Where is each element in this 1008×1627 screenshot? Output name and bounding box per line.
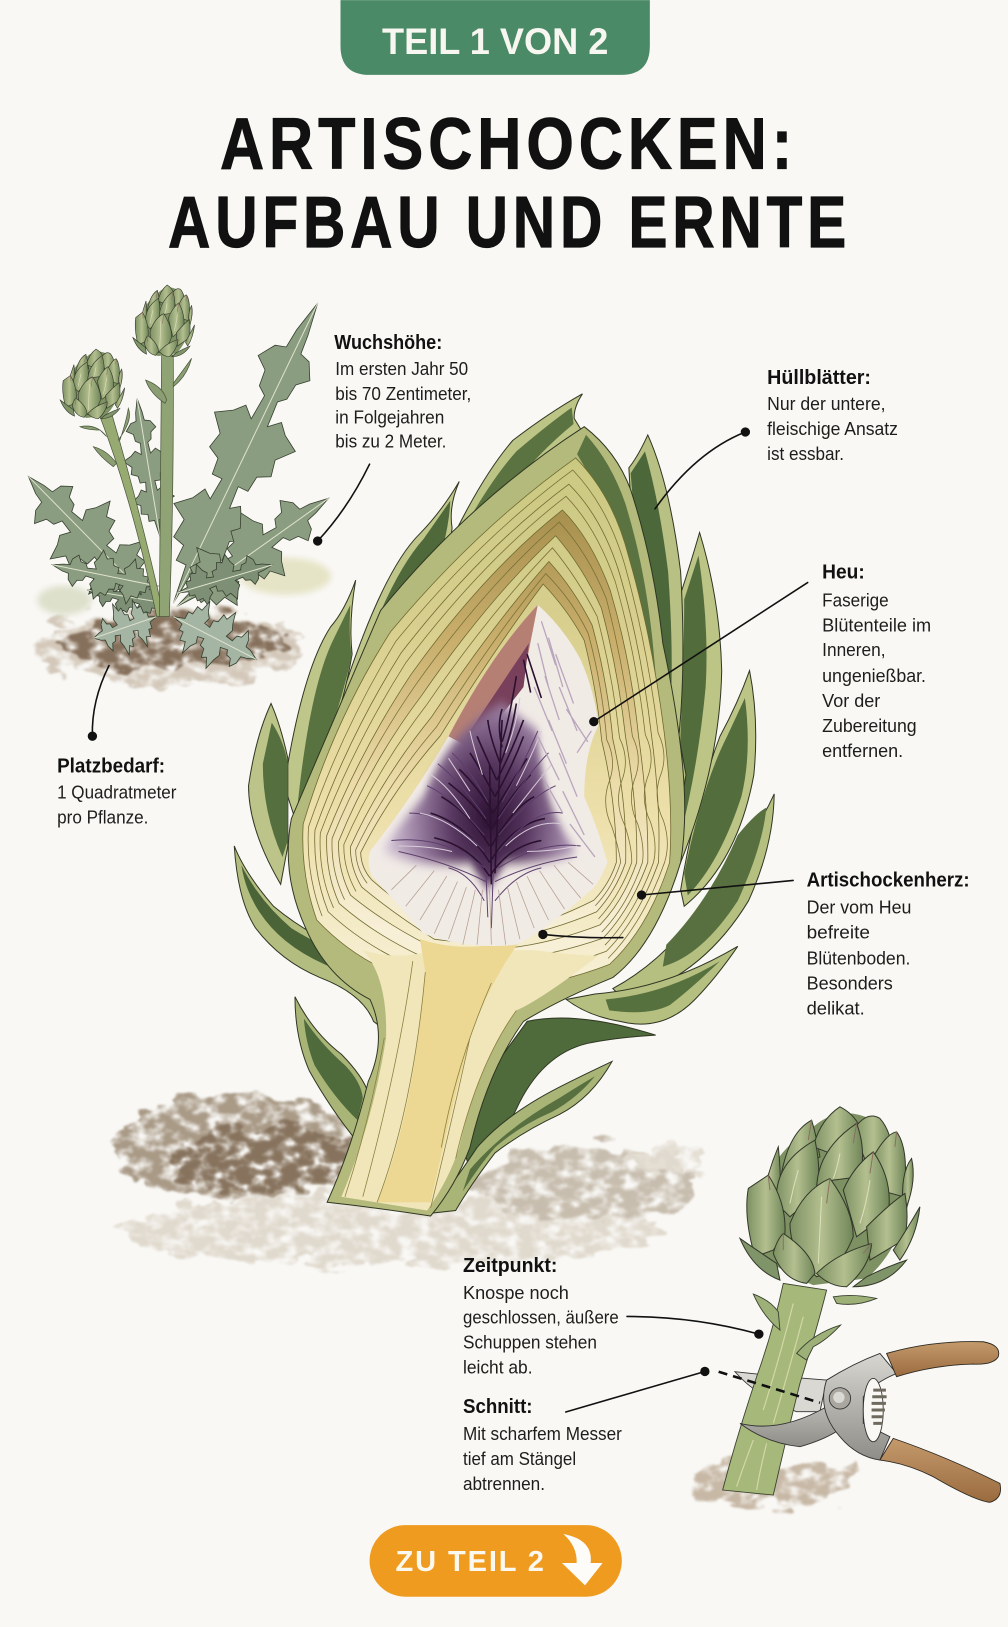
soil under the main artichoke xyxy=(109,1095,706,1266)
callout: Heu: Heu: xyxy=(822,561,865,583)
button: to part 2 xyxy=(370,1525,622,1597)
callout: Schnitt: tief am Stängel xyxy=(463,1448,576,1469)
right dark bract strip xyxy=(577,435,661,731)
title xyxy=(168,103,851,263)
callout: Platzbedarf: 1 Quadratmeter xyxy=(57,781,176,802)
callout: Heu: entfernen. xyxy=(822,740,903,761)
callout: Zeitpunkt: Knospe noch xyxy=(463,1282,569,1303)
callout: Heu: ungenießbar. xyxy=(822,665,926,686)
illustration: harvest bud with pruning shears xyxy=(690,1107,1001,1507)
cut line xyxy=(719,1372,820,1403)
stem xyxy=(723,1283,827,1495)
outer bracts xyxy=(234,394,774,1213)
stem xyxy=(341,950,599,1210)
shears rear blade xyxy=(735,1372,827,1412)
callout: Zeitpunkt: Schuppen stehen xyxy=(463,1332,597,1353)
body xyxy=(288,427,685,1216)
illustration: small whole plant xyxy=(0,283,358,687)
callout: Wuchshöhe: Im ersten Jahr 50 xyxy=(335,358,468,379)
callout: Hüllblätter xyxy=(655,367,898,509)
callout: Hüllblätter: Nur der untere, xyxy=(767,393,886,414)
callout: Platzbedarf: Platzbedarf: xyxy=(57,755,165,777)
callout: Artischockenherz: Der vom Heu xyxy=(807,897,911,918)
callout: Schnitt: Schnitt: xyxy=(463,1396,533,1418)
badge: part 1 of 2: TEIL 1 VON 2 xyxy=(382,20,608,62)
callout: Artischockenherz: delikat. xyxy=(807,997,865,1018)
inner layers xyxy=(303,458,671,989)
bud xyxy=(740,1107,920,1287)
callout: Artischockenherz: Blütenboden. xyxy=(807,948,910,969)
callout: Zeitpunkt xyxy=(463,1255,764,1378)
layer contour lines xyxy=(308,470,667,958)
button: to part 2: ZU TEIL 2 xyxy=(396,1546,544,1578)
callout: Artischockenherz: Besonders xyxy=(807,972,893,993)
callout: Heu xyxy=(589,561,931,761)
callout: Heu: Zubereitung xyxy=(822,715,917,736)
callout: Zeitpunkt: leicht ab. xyxy=(463,1357,533,1378)
callout: Wuchshöhe xyxy=(313,332,471,546)
title: AUFBAU UND ERNTE xyxy=(168,182,851,263)
callout: Wuchshöhe: bis 70 Zentimeter, xyxy=(335,383,471,404)
callout: Artischockenherz xyxy=(538,870,970,1018)
callout: Wuchshöhe: in Folgejahren xyxy=(335,407,444,428)
callout: Artischockenherz: befreite xyxy=(807,922,870,943)
illustration: artichoke cross-section xyxy=(234,394,774,1216)
callout: Zeitpunkt: geschlossen, äußere xyxy=(463,1307,619,1328)
callout: Schnitt xyxy=(463,1367,710,1494)
callout: Wuchshöhe: Wuchshöhe: xyxy=(334,332,442,354)
callout: Heu: Faserige xyxy=(822,589,889,610)
callout: Platzbedarf xyxy=(57,666,176,827)
callout: Platzbedarf: pro Pflanze. xyxy=(57,806,148,827)
callout: Hüllblätter: Hüllblätter: xyxy=(767,367,871,389)
badge: part 1 of 2 xyxy=(340,0,650,75)
choke / hay xyxy=(369,605,607,946)
callout: Hüllblätter: ist essbar. xyxy=(767,443,844,464)
callout: Hüllblätter: fleischige Ansatz xyxy=(767,418,898,439)
callout: Wuchshöhe: bis zu 2 Meter. xyxy=(335,431,446,452)
title: ARTISCHOCKEN: xyxy=(220,103,797,184)
callout: Heu: Inneren, xyxy=(822,639,886,660)
icon: curved down arrow xyxy=(562,1534,603,1585)
callout: Heu: Vor der xyxy=(822,690,880,711)
callout: Schnitt: Mit scharfem Messer xyxy=(463,1423,622,1444)
callout: Artischockenherz: Artischockenherz: xyxy=(807,870,970,892)
callout: Zeitpunkt: Zeitpunkt: xyxy=(463,1255,557,1277)
shears body xyxy=(740,1380,857,1447)
callout: Heu: Blütenteile im xyxy=(822,614,931,635)
callout: Schnitt: abtrennen. xyxy=(463,1473,545,1494)
